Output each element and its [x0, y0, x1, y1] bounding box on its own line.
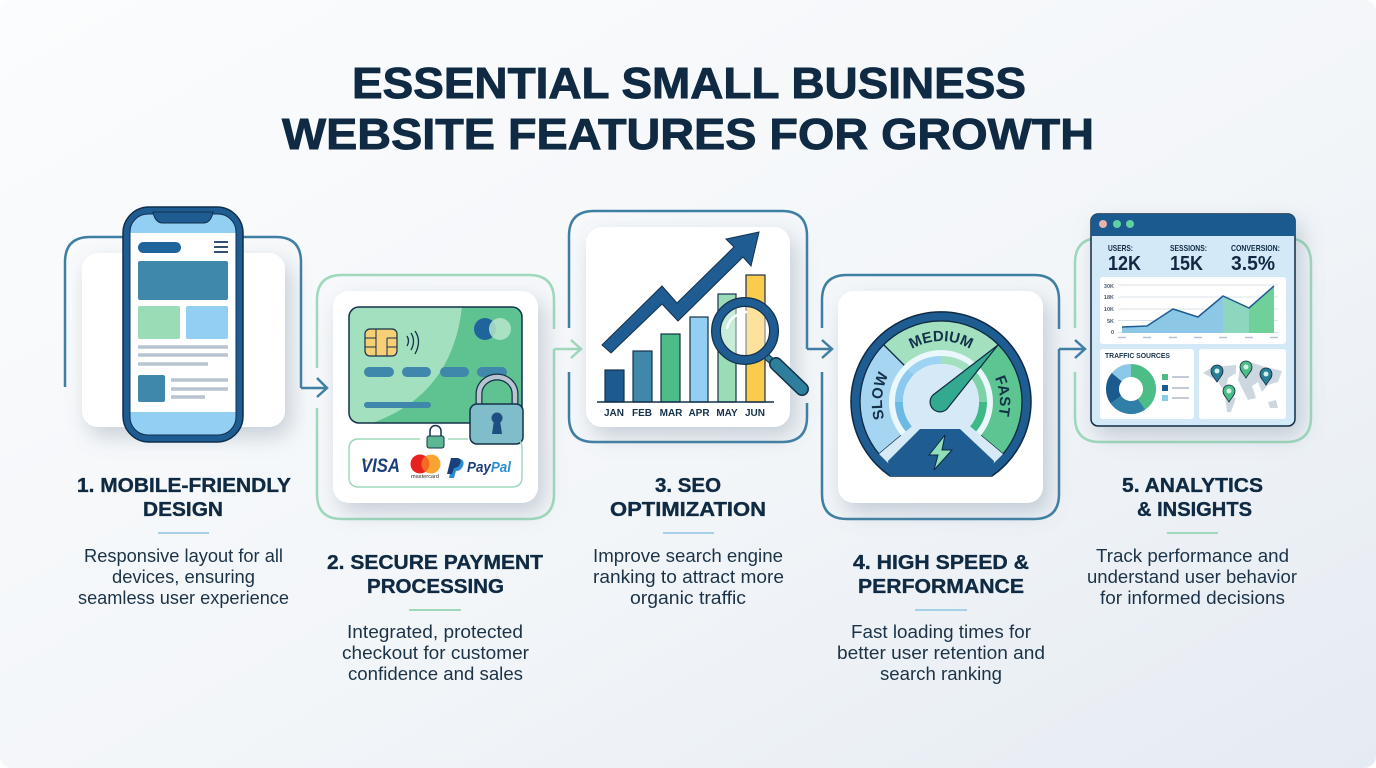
- heading: step 3: OPTIMIZATION: [610, 499, 766, 521]
- heading: step 4: [853, 552, 1029, 598]
- logo: Mastercard: [410, 454, 440, 480]
- text: step 1 description: devices, ensuring: [112, 566, 255, 587]
- text: step 2 description: [342, 621, 529, 684]
- icon: speedometer gauge: MEDIUM: [908, 330, 974, 348]
- heading: step 1: [77, 475, 292, 521]
- icon: analytics dashboard window: [1091, 214, 1295, 426]
- KPI stats: 15K: [1170, 253, 1203, 275]
- text: step 4 description: search ranking: [880, 663, 1002, 684]
- text: step 4 description: better user retention and: [837, 642, 1045, 663]
- KPI stats: 12K: [1108, 253, 1141, 275]
- line chart: 5K: [1107, 319, 1114, 325]
- text: step 5 description: Track performance and: [1096, 545, 1289, 566]
- heading: step 1: DESIGN: [143, 499, 223, 521]
- text: step 3 description: [593, 545, 784, 608]
- icon: speedometer gauge: FAST: [995, 375, 1010, 417]
- heading: step 5: & INSIGHTS: [1137, 499, 1252, 521]
- KPI stats: [1108, 243, 1280, 275]
- logo: Visa: VISA: [361, 456, 400, 477]
- card: step 2: [333, 291, 538, 503]
- card: step 1: [82, 253, 285, 427]
- title: WEBSITE FEATURES FOR GROWTH: [282, 110, 1094, 159]
- icon: speedometer gauge: [850, 311, 1032, 477]
- text: step 3 description: organic traffic: [630, 587, 746, 608]
- panel: step 4 high speed and performance: [820, 274, 1087, 684]
- frame: step 3 outline: [569, 211, 807, 442]
- heading: step 4: PERFORMANCE: [858, 576, 1024, 598]
- text: step 3 description: ranking to attract more: [593, 566, 784, 587]
- bar chart: monthly growth: JUN: [745, 408, 765, 419]
- bar chart: monthly growth: FEB: [632, 408, 652, 419]
- frame: step 4 outline: [822, 275, 1059, 519]
- bar chart: monthly growth: MAR: [660, 408, 683, 419]
- KPI stats: 3.5%: [1231, 253, 1275, 275]
- line chart: 18K: [1104, 295, 1114, 301]
- text: step 1 description: Responsive layout for all: [84, 545, 283, 566]
- title: [282, 59, 1094, 159]
- panel: step 5 analytics and insights: [1075, 214, 1311, 608]
- heading: step 3: [610, 475, 766, 521]
- frame: step 5 outline: [1075, 238, 1311, 442]
- logo: Mastercard: mastercard: [411, 474, 439, 480]
- text: step 1 description: [78, 545, 289, 608]
- heading: step 2: [327, 552, 543, 598]
- line chart: 0: [1111, 330, 1114, 336]
- traffic sources donut: [1100, 349, 1194, 419]
- heading: step 4: 4. HIGH SPEED &: [853, 552, 1029, 574]
- icon: growth arrow: [602, 232, 759, 353]
- text: step 3 description: Improve search engine: [593, 545, 783, 566]
- icon: magnifying glass: [716, 302, 802, 389]
- card: step 3: [586, 227, 790, 427]
- bar chart: monthly growth: [597, 275, 774, 419]
- line chart: 10K: [1104, 307, 1114, 313]
- bar chart: monthly growth: APR: [688, 408, 710, 419]
- heading: step 2: 2. SECURE PAYMENT: [327, 552, 543, 574]
- panel: step 3 SEO optimization: [569, 211, 832, 608]
- heading: step 2: PROCESSING: [367, 576, 504, 598]
- line chart: 30K: [1104, 284, 1114, 290]
- text: step 2 description: checkout for customer: [342, 642, 529, 663]
- payment logos box: [349, 426, 522, 487]
- logo: PayPal: [447, 458, 512, 478]
- KPI stats: USERS:: [1108, 243, 1133, 253]
- frame: step 1 outline: [65, 237, 301, 388]
- panel: step 2 secure payment processing: [317, 275, 581, 684]
- arrow: step 1 to step 2: [301, 378, 327, 397]
- icon: small padlock: [427, 426, 444, 448]
- arrow: step 4 to step 5: [1059, 340, 1085, 358]
- bar chart: monthly growth: MAY: [716, 408, 738, 419]
- heading: step 1: 1. MOBILE-FRIENDLY: [77, 475, 292, 497]
- heading: step 3: 3. SEO: [655, 475, 721, 497]
- arrow: step 2 to step 3: [554, 340, 581, 358]
- text: step 2 description: confidence and sales: [348, 663, 523, 684]
- icon: smartphone: [123, 207, 243, 442]
- title: ESSENTIAL SMALL BUSINESS: [352, 59, 1026, 108]
- text: step 1 description: seamless user experience: [78, 587, 289, 608]
- KPI stats: CONVERSION:: [1231, 243, 1280, 253]
- bar chart: monthly growth: JAN: [604, 408, 624, 419]
- icon: credit card: [349, 307, 522, 423]
- panel: step 1 mobile-friendly design: [65, 207, 327, 608]
- heading: step 5: [1122, 475, 1263, 521]
- text: step 2 description: Integrated, protected: [347, 621, 523, 642]
- icon: large padlock: [470, 377, 523, 444]
- text: step 4 description: [837, 621, 1045, 684]
- heading: step 5: 5. ANALYTICS: [1122, 475, 1263, 497]
- traffic sources donut: TRAFFIC SOURCES: [1105, 353, 1170, 360]
- text: step 5 description: understand user behavior: [1087, 566, 1297, 587]
- world map with pins: [1199, 349, 1286, 419]
- text: step 5 description: for informed decisions: [1100, 587, 1285, 608]
- icon: speedometer gauge: SLOW: [872, 371, 888, 420]
- line chart: [1100, 277, 1286, 344]
- frame: step 2 outline: [317, 275, 554, 519]
- text: step 5 description: [1087, 545, 1297, 608]
- text: step 4 description: Fast loading times for: [851, 621, 1031, 642]
- KPI stats: SESSIONS:: [1170, 243, 1207, 253]
- card: step 4: [838, 291, 1043, 503]
- arrow: step 3 to step 4: [807, 340, 832, 358]
- logo: PayPal: PayPal: [467, 459, 512, 476]
